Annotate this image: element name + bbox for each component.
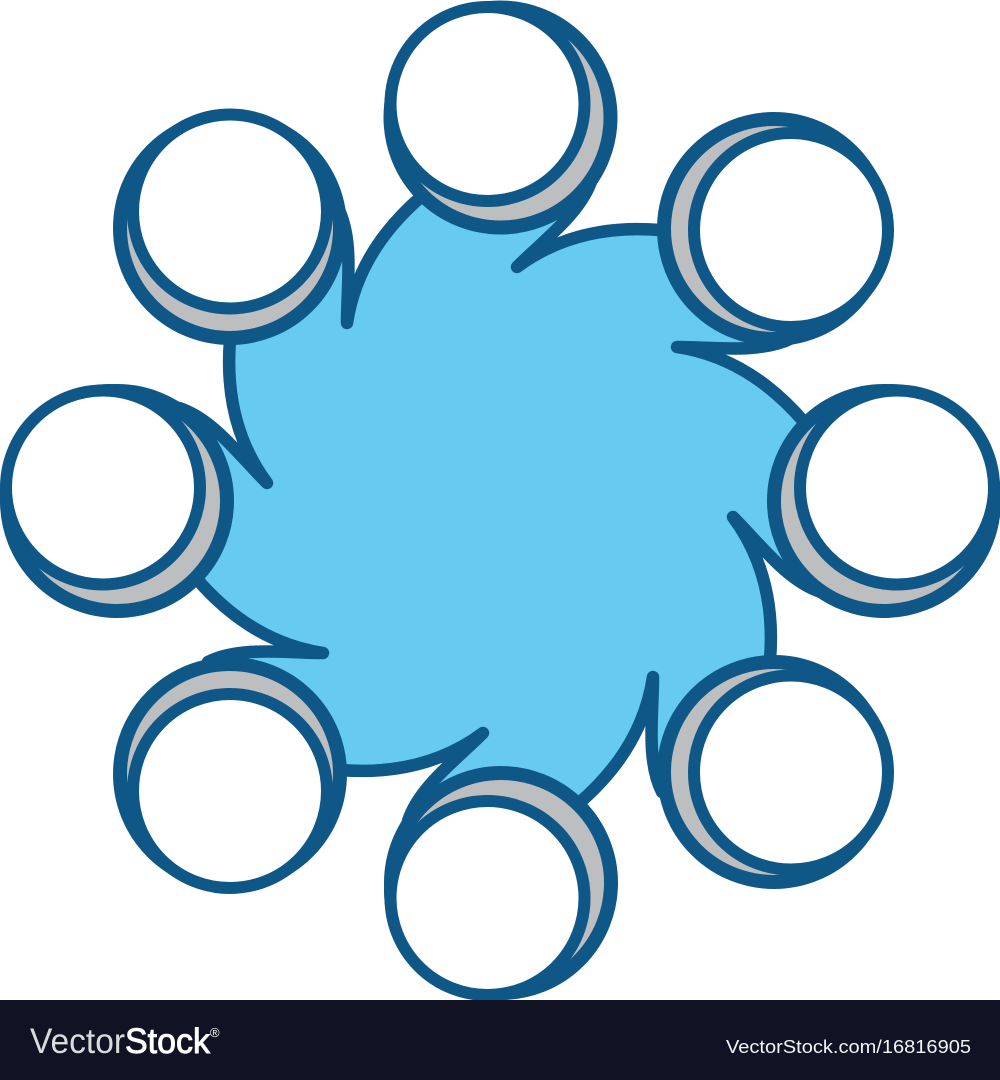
circle: left [0,384,227,611]
circle: top right [664,119,892,340]
image id text: VectorStock.com/16816905 [726,1036,971,1057]
brand logo text: Vector [30,1022,125,1061]
central blue blob with eight curled tails [179,179,821,821]
circle: bottom right [664,662,892,882]
circle: bottom [384,773,611,1000]
brand logo text: ® [210,1025,220,1040]
circle: top left [120,110,340,338]
footer banner [0,1000,1000,1080]
circle: top [384,1,610,228]
circle: bottom left [120,664,340,892]
brand logo text: Stock [125,1022,210,1061]
brand logo text [30,1022,220,1061]
circle: right [774,384,1000,611]
